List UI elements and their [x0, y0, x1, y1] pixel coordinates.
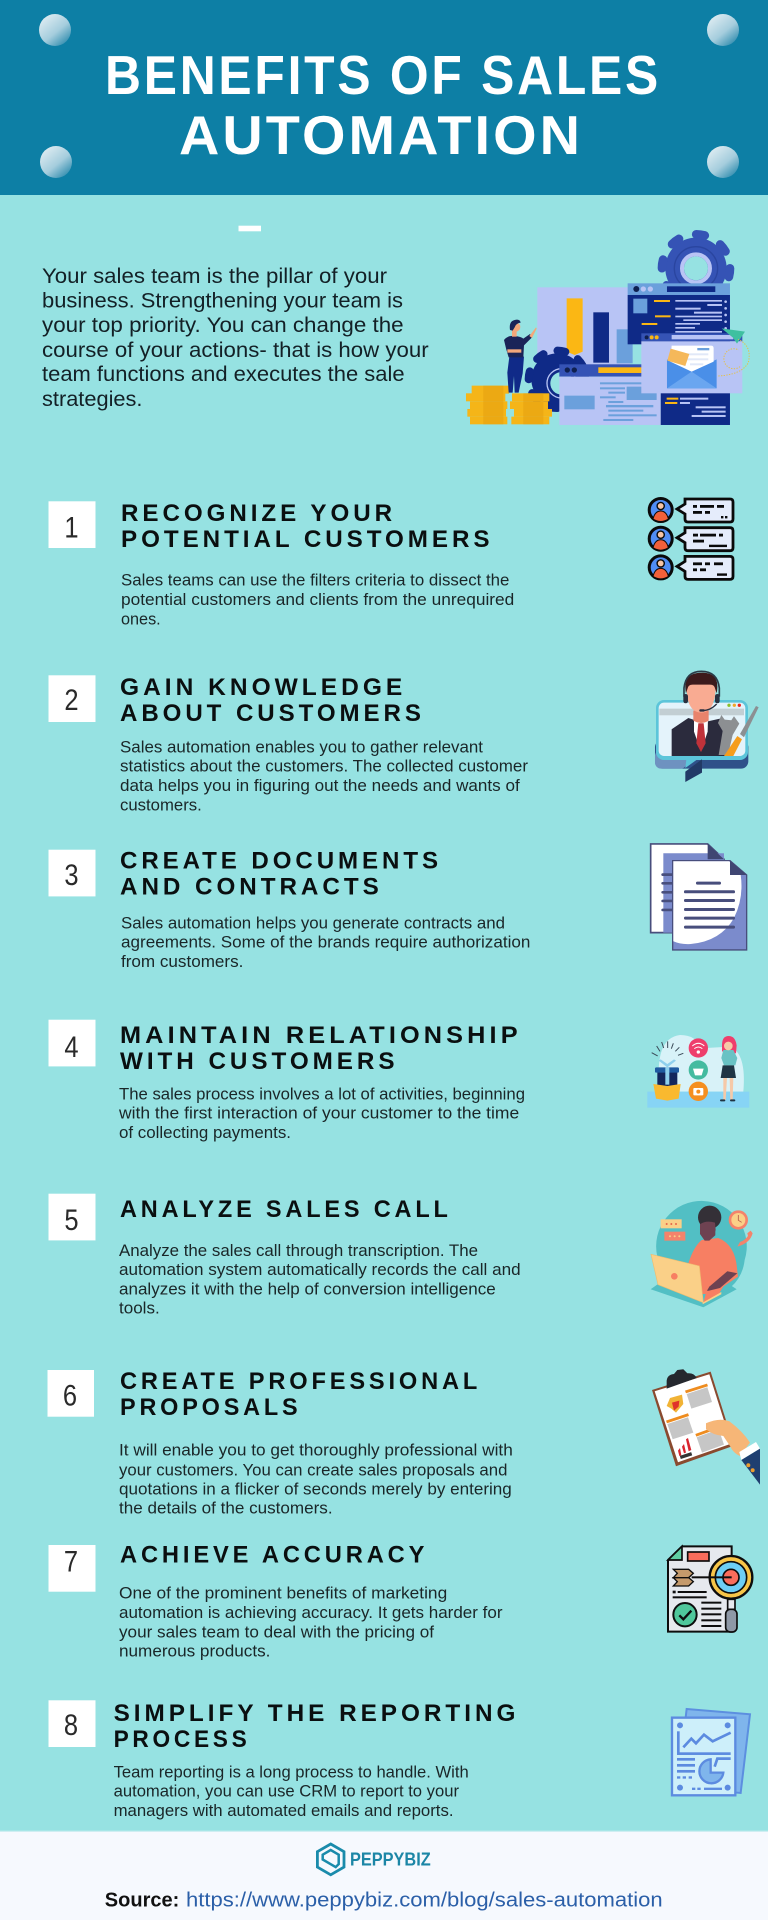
body text 7: automation is achieving accuracy. It gets harder for [119, 1603, 503, 1622]
heading 8: SIMPLIFY THE REPORTING [114, 1700, 519, 1727]
number badge 4: 4 [64, 1030, 79, 1063]
footer [0, 1831, 768, 1920]
heading 1 [121, 500, 494, 553]
intro text: team functions and executes the sale [42, 363, 405, 386]
number badge 2: 2 [64, 683, 79, 716]
code window [628, 283, 730, 344]
body text 3: agreements. Some of the brands require authorization [121, 933, 530, 952]
body text 4 [118, 1084, 525, 1142]
body text 7 [119, 1584, 503, 1661]
body text 8: automation, you can use CRM to report to your [114, 1782, 459, 1801]
heading 1: POTENTIAL CUSTOMERS [121, 526, 494, 553]
heading 4: MAINTAIN RELATIONSHIP [120, 1022, 522, 1049]
title: BENEFITS OF SALES [105, 45, 661, 106]
source line: Source: [105, 1890, 179, 1912]
heading 2: ABOUT CUSTOMERS [120, 700, 425, 727]
intro text: strategies. [42, 388, 142, 411]
decorative sphere bottom left [40, 146, 72, 178]
step 6 [48, 1368, 760, 1517]
number badge 6: 6 [63, 1379, 77, 1412]
body text 6: your customers. You can create sales proposals and [119, 1460, 507, 1479]
step 4 [48, 1020, 749, 1142]
body text 1: potential customers and clients from the unrequired [121, 590, 514, 609]
heading 2 [120, 674, 425, 727]
heading 8 [114, 1700, 519, 1753]
decorative sphere bottom right [707, 146, 739, 178]
body text 1: Sales teams can use the filters criteria to dissect the [121, 571, 509, 590]
number badge 2 [48, 675, 96, 722]
logo: PeppyBiz: PEPPYBIZ [350, 1849, 431, 1870]
heading 3 [120, 848, 442, 901]
icon: report sheets with charts [672, 1709, 750, 1795]
intro text: business. Strengthening your team is [42, 290, 403, 312]
body text 3: from customers. [121, 952, 243, 971]
gear top [662, 234, 730, 302]
email window [641, 328, 749, 393]
number badge 8 [48, 1700, 96, 1747]
number badge 3: 3 [64, 858, 79, 891]
step 5 [48, 1194, 753, 1318]
intro text [42, 265, 429, 411]
number badge 1 [48, 501, 96, 548]
body text 8: managers with automated emails and reports. [114, 1801, 453, 1820]
icon: documents [651, 844, 747, 950]
body text 5 [119, 1241, 521, 1318]
body text 7: numerous products. [119, 1642, 270, 1661]
number badge 7: 7 [64, 1545, 78, 1578]
number badge 1: 1 [64, 511, 79, 544]
number badge 3 [48, 850, 96, 896]
body text 1 [121, 571, 514, 628]
icon: gift box, social circles and woman [647, 1035, 749, 1108]
body text 4: of collecting payments. [119, 1123, 291, 1142]
decorative sphere top left [39, 14, 71, 46]
body text 7: One of the prominent benefits of marketing [119, 1584, 447, 1603]
body text 2: customers. [120, 795, 202, 814]
intro text: course of your actions- that is how your [42, 339, 429, 362]
heading 4 [120, 1022, 522, 1075]
body text 3 [121, 913, 530, 971]
body text 8: Team reporting is a long process to handle. With [114, 1762, 469, 1781]
body text 6: the details of the customers. [119, 1498, 333, 1517]
body text 7: your sales team to deal with the pricing of [119, 1622, 434, 1641]
hero illustration: dashboard, gears, person, coins [466, 234, 749, 425]
lower code panel [661, 393, 730, 425]
body text 5: Analyze the sales call through transcription. The [119, 1241, 478, 1260]
decorative sphere top right [707, 14, 739, 46]
body text 5: analyzes it with the help of conversion intelligence [119, 1279, 496, 1298]
step 2 [48, 671, 759, 814]
source line: https://www.peppybiz.com/blog/sales-automation [186, 1890, 663, 1912]
body text 5: automation system automatically records the call and [119, 1260, 521, 1279]
heading 3: AND CONTRACTS [120, 874, 383, 901]
body text 3: Sales automation helps you generate contracts and [121, 913, 505, 932]
body text 2 [120, 738, 528, 814]
body text 2: Sales automation enables you to gather relevant [120, 738, 483, 757]
front window [559, 364, 661, 425]
heading 6 [120, 1368, 481, 1421]
heading 8: PROCESS [114, 1726, 250, 1753]
body text 8 [114, 1762, 469, 1820]
coins [466, 386, 552, 424]
heading 6: PROPOSALS [120, 1394, 302, 1421]
icon: support agent with tools [655, 671, 759, 782]
number badge 4 [48, 1020, 96, 1066]
step 8 [48, 1700, 750, 1820]
heading 2: GAIN KNOWLEDGE [120, 674, 406, 701]
number badge 5 [48, 1194, 96, 1240]
step 3 [48, 844, 747, 971]
number badge 5: 5 [64, 1203, 79, 1236]
navy gear [529, 351, 586, 408]
body text 1: ones. [121, 609, 161, 628]
icon: woman on call with laptop [651, 1201, 753, 1307]
number badge 8: 8 [64, 1708, 78, 1741]
heading 6: CREATE PROFESSIONAL [120, 1368, 481, 1395]
number badge 6 [48, 1370, 94, 1417]
header banner [0, 0, 768, 195]
small white dash [238, 226, 261, 231]
body text 4: with the first interaction of your customer to the time [118, 1104, 519, 1123]
logo: PeppyBiz [317, 1844, 431, 1875]
person pointing [504, 320, 537, 393]
number badge 7 [48, 1545, 96, 1592]
body text 4: The sales process involves a lot of activities, beginning [119, 1084, 525, 1103]
body text 2: statistics about the customers. The collected customer [120, 757, 528, 776]
heading 1: RECOGNIZE YOUR [121, 500, 396, 527]
step 1 [48, 498, 733, 628]
icon: target document with magnifier [668, 1546, 752, 1632]
icon: clipboard report held by hand [652, 1369, 760, 1485]
heading 4: WITH CUSTOMERS [120, 1048, 398, 1075]
step 7 [48, 1541, 752, 1661]
title [105, 45, 661, 166]
icon: customers with speech bubbles [649, 498, 733, 579]
heading 3: CREATE DOCUMENTS [120, 848, 442, 875]
body text 6: It will enable you to get thoroughly professional with [119, 1441, 513, 1460]
intro text: your top priority. You can change the [42, 314, 404, 337]
body text 2: data helps you in figuring out the needs and wants of [120, 776, 520, 795]
body text 6 [119, 1441, 513, 1517]
heading 5: ANALYZE SALES CALL [120, 1196, 452, 1223]
body text 5: tools. [119, 1299, 160, 1318]
heading 7: ACHIEVE ACCURACY [120, 1541, 428, 1568]
body text 6: quotations in a flicker of seconds merely by entering [119, 1479, 512, 1498]
title: AUTOMATION [179, 105, 583, 166]
bar chart panel [537, 287, 633, 367]
intro text: Your sales team is the pillar of your [42, 265, 387, 288]
